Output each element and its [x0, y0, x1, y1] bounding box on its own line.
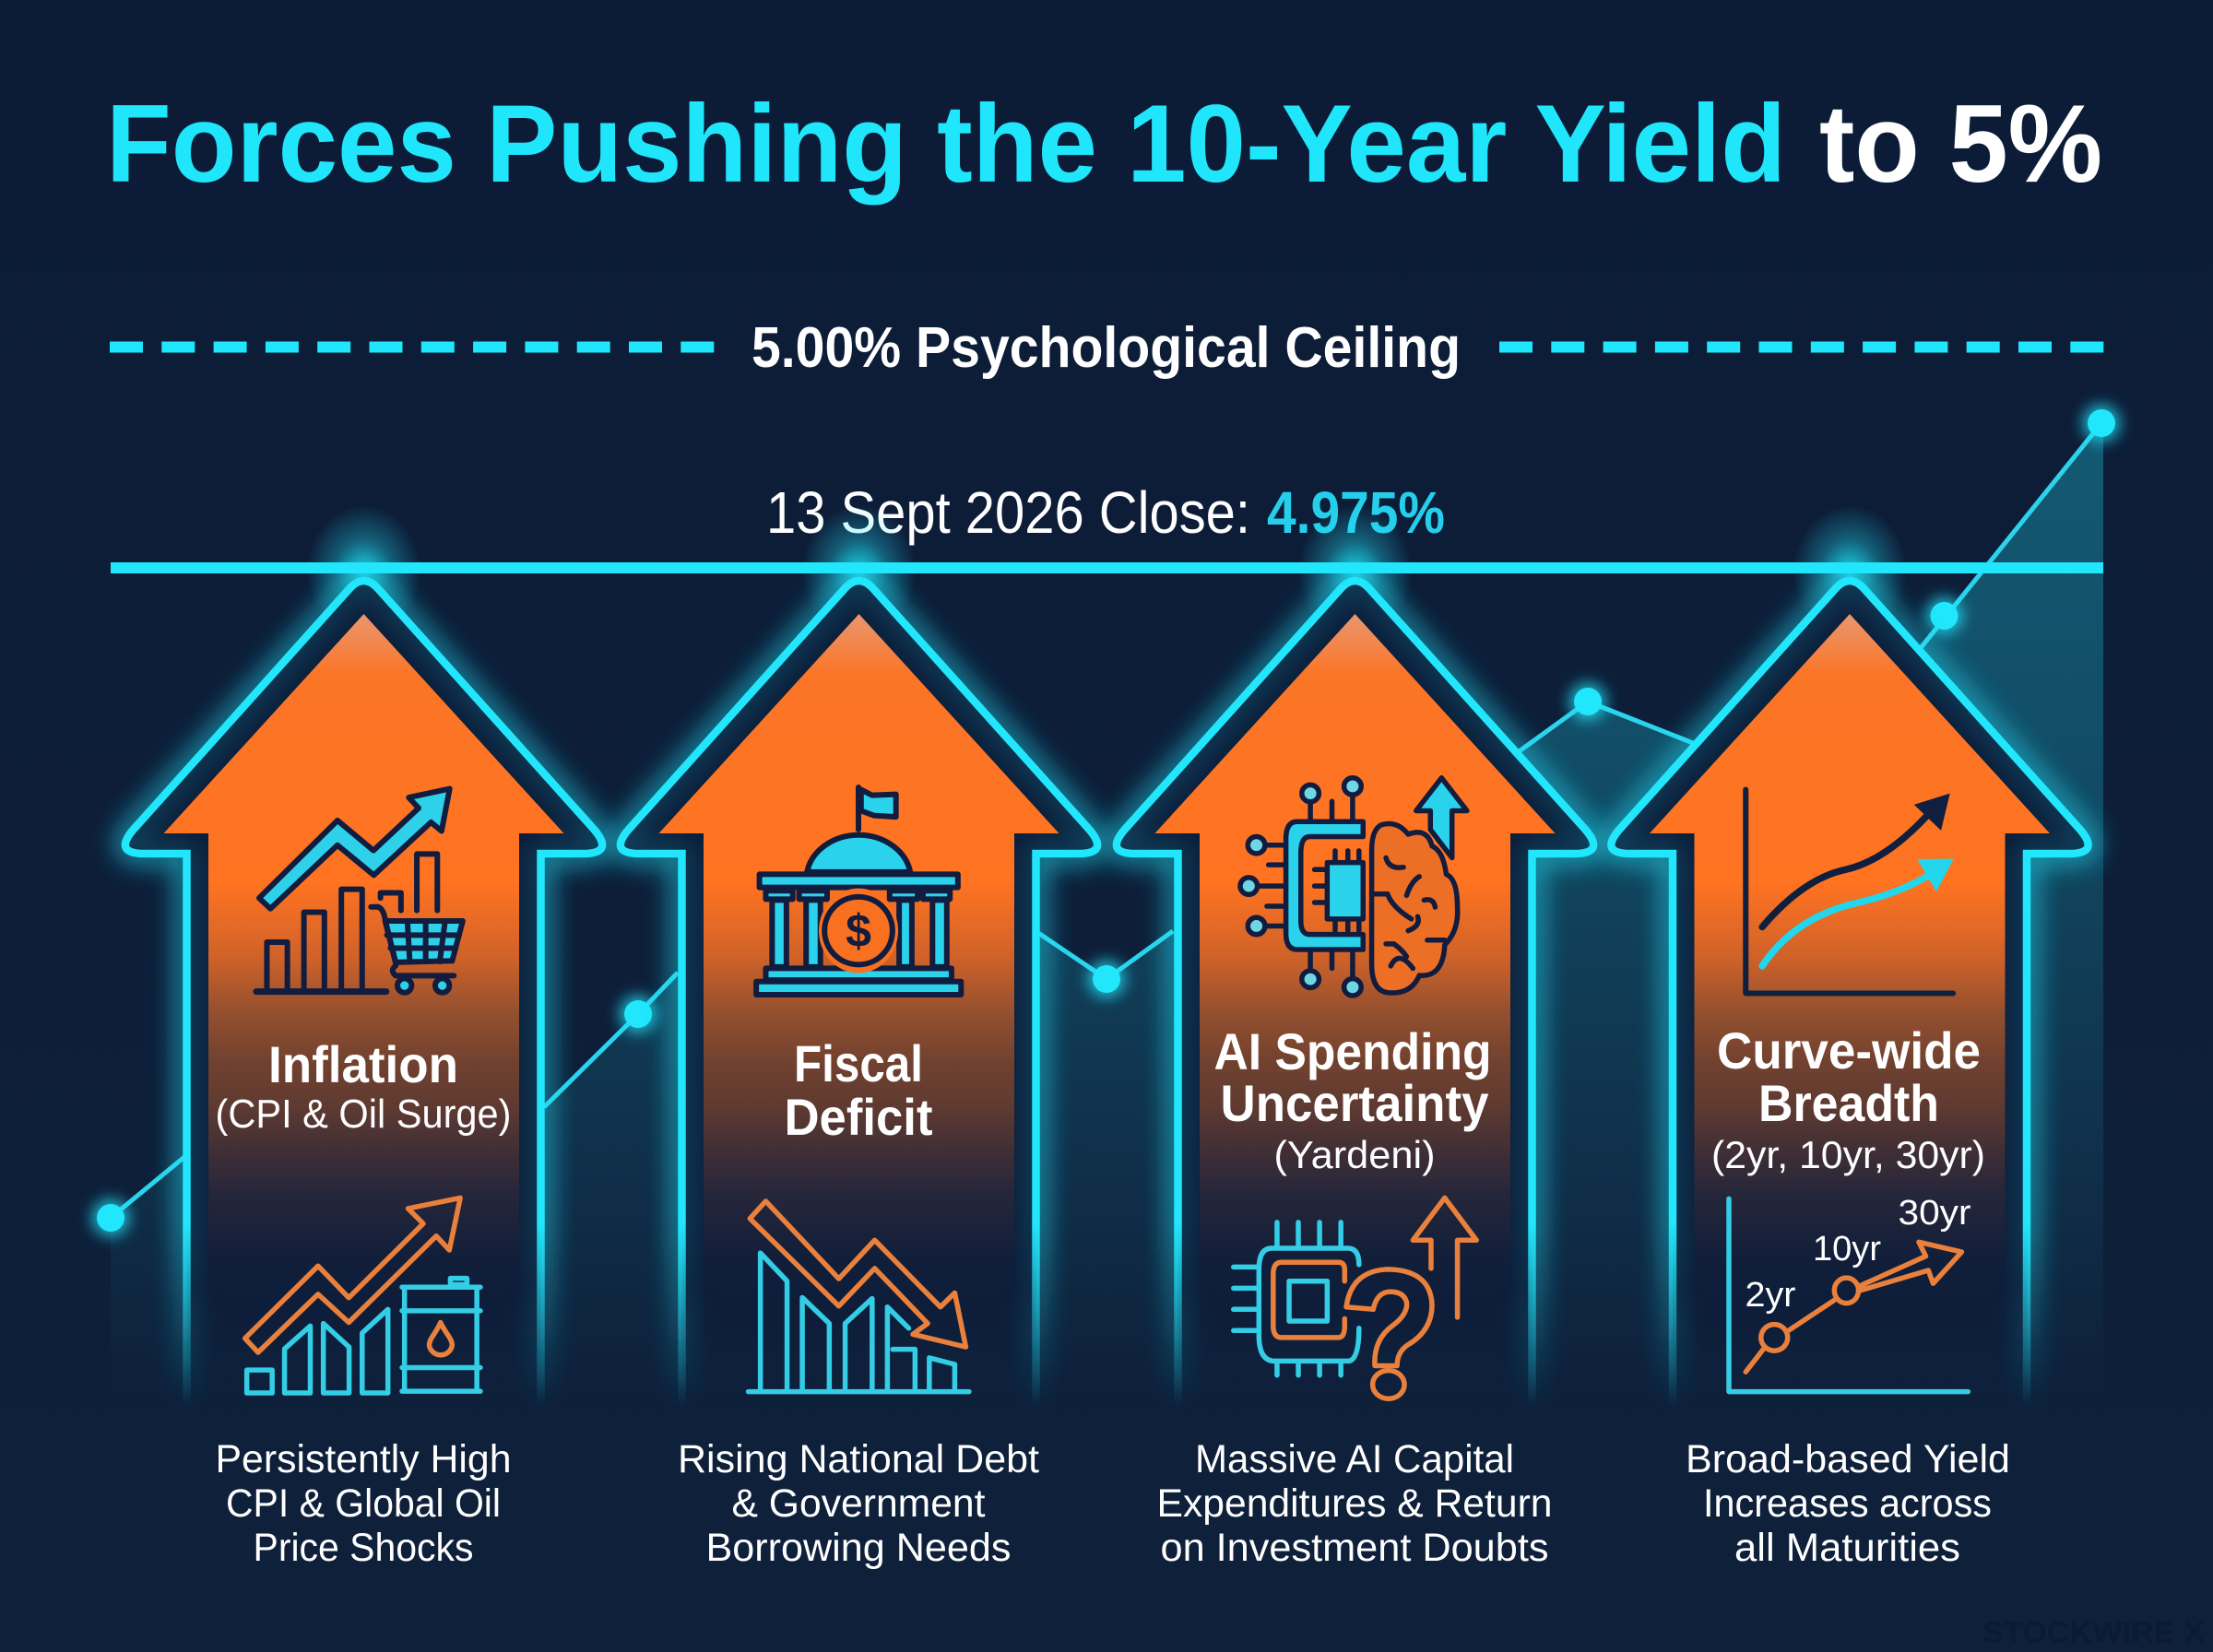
rising yield line chart behind arrows	[92, 405, 2120, 1398]
heading: AI spending uncertainty	[1213, 1022, 1492, 1176]
close value label: 4.975%	[1267, 479, 1445, 546]
panel: curve-wide breadth arrow	[1611, 505, 2089, 1570]
description: fiscal deficit: & Government	[732, 1481, 986, 1526]
close value label: 13 Sept 2026 Close:	[766, 479, 1250, 546]
description: curve-wide breadth	[1686, 1437, 2010, 1570]
heading: AI spending uncertainty: (Yardeni)	[1274, 1133, 1435, 1176]
description: curve-wide breadth: Increases across	[1703, 1481, 1992, 1526]
description: inflation	[216, 1437, 511, 1570]
description: fiscal deficit: Borrowing Needs	[706, 1526, 1011, 1570]
icon: government building with dollar coin	[756, 787, 961, 995]
panel: fiscal deficit arrow	[621, 505, 1097, 1570]
icon: government building with dollar coin: $	[846, 905, 871, 957]
chart: 2yr 10yr 30yr curve: 30yr	[1898, 1194, 1971, 1233]
chart: 2yr 10yr 30yr curve	[1729, 1194, 1971, 1392]
panel: inflation arrow	[125, 505, 602, 1570]
watermark: STOCKWIRE X	[1982, 1615, 2205, 1649]
title: Forces Pushing the 10-Year Yield	[106, 82, 1786, 206]
chart: 2yr 10yr 30yr curve: 10yr	[1813, 1230, 1881, 1268]
current yield line	[111, 562, 2103, 573]
heading: curve-wide breadth	[1711, 1021, 1985, 1176]
icon: falling arrow over shrinking bars	[749, 1201, 969, 1392]
heading: fiscal deficit: Deficit	[784, 1088, 933, 1146]
heading: inflation: Inflation	[268, 1035, 458, 1093]
icon: oil barrel and rising arrow	[245, 1198, 480, 1393]
description: inflation: Price Shocks	[253, 1526, 474, 1570]
subheading: CPI and oil surge: (CPI & Oil Surge)	[216, 1092, 511, 1137]
panel: AI spending uncertainty arrow	[1117, 505, 1593, 1570]
heading: curve-wide breadth: Breadth	[1758, 1074, 1939, 1132]
description: curve-wide breadth: all Maturities	[1734, 1526, 1960, 1570]
5% psychological ceiling line and label: 5.00% Psychological Ceiling	[751, 316, 1461, 380]
description: fiscal deficit: Rising National Debt	[678, 1437, 1039, 1481]
description: inflation: CPI & Global Oil	[226, 1481, 501, 1526]
title: to 5%	[1819, 82, 2102, 206]
description: AI spending: on Investment Doubts	[1160, 1526, 1549, 1570]
icon: rising chart with shopping cart	[256, 789, 463, 993]
heading: AI spending uncertainty: AI Spending	[1213, 1022, 1492, 1080]
description: AI spending: Massive AI Capital	[1195, 1437, 1514, 1481]
heading: curve-wide breadth: (2yr, 10yr, 30yr)	[1711, 1133, 1985, 1176]
heading: curve-wide breadth: Curve-wide	[1717, 1021, 1981, 1080]
description: inflation: Persistently High	[216, 1437, 511, 1481]
description: AI spending: Expenditures & Return	[1156, 1481, 1553, 1526]
description: fiscal deficit	[678, 1437, 1039, 1570]
description: curve-wide breadth: Broad-based Yield	[1686, 1437, 2010, 1481]
icon: chip and brain with up arrow	[1240, 778, 1467, 996]
heading: fiscal deficit	[784, 1034, 933, 1146]
description: AI spending	[1156, 1437, 1553, 1570]
icon: chip with question mark and up arrow	[1234, 1198, 1476, 1398]
icon: yield curves chart	[1746, 790, 1954, 993]
chart: 2yr 10yr 30yr curve: 2yr	[1745, 1276, 1796, 1315]
heading: fiscal deficit: Fiscal	[794, 1034, 923, 1092]
heading: AI spending uncertainty: Uncertainty	[1221, 1074, 1488, 1132]
